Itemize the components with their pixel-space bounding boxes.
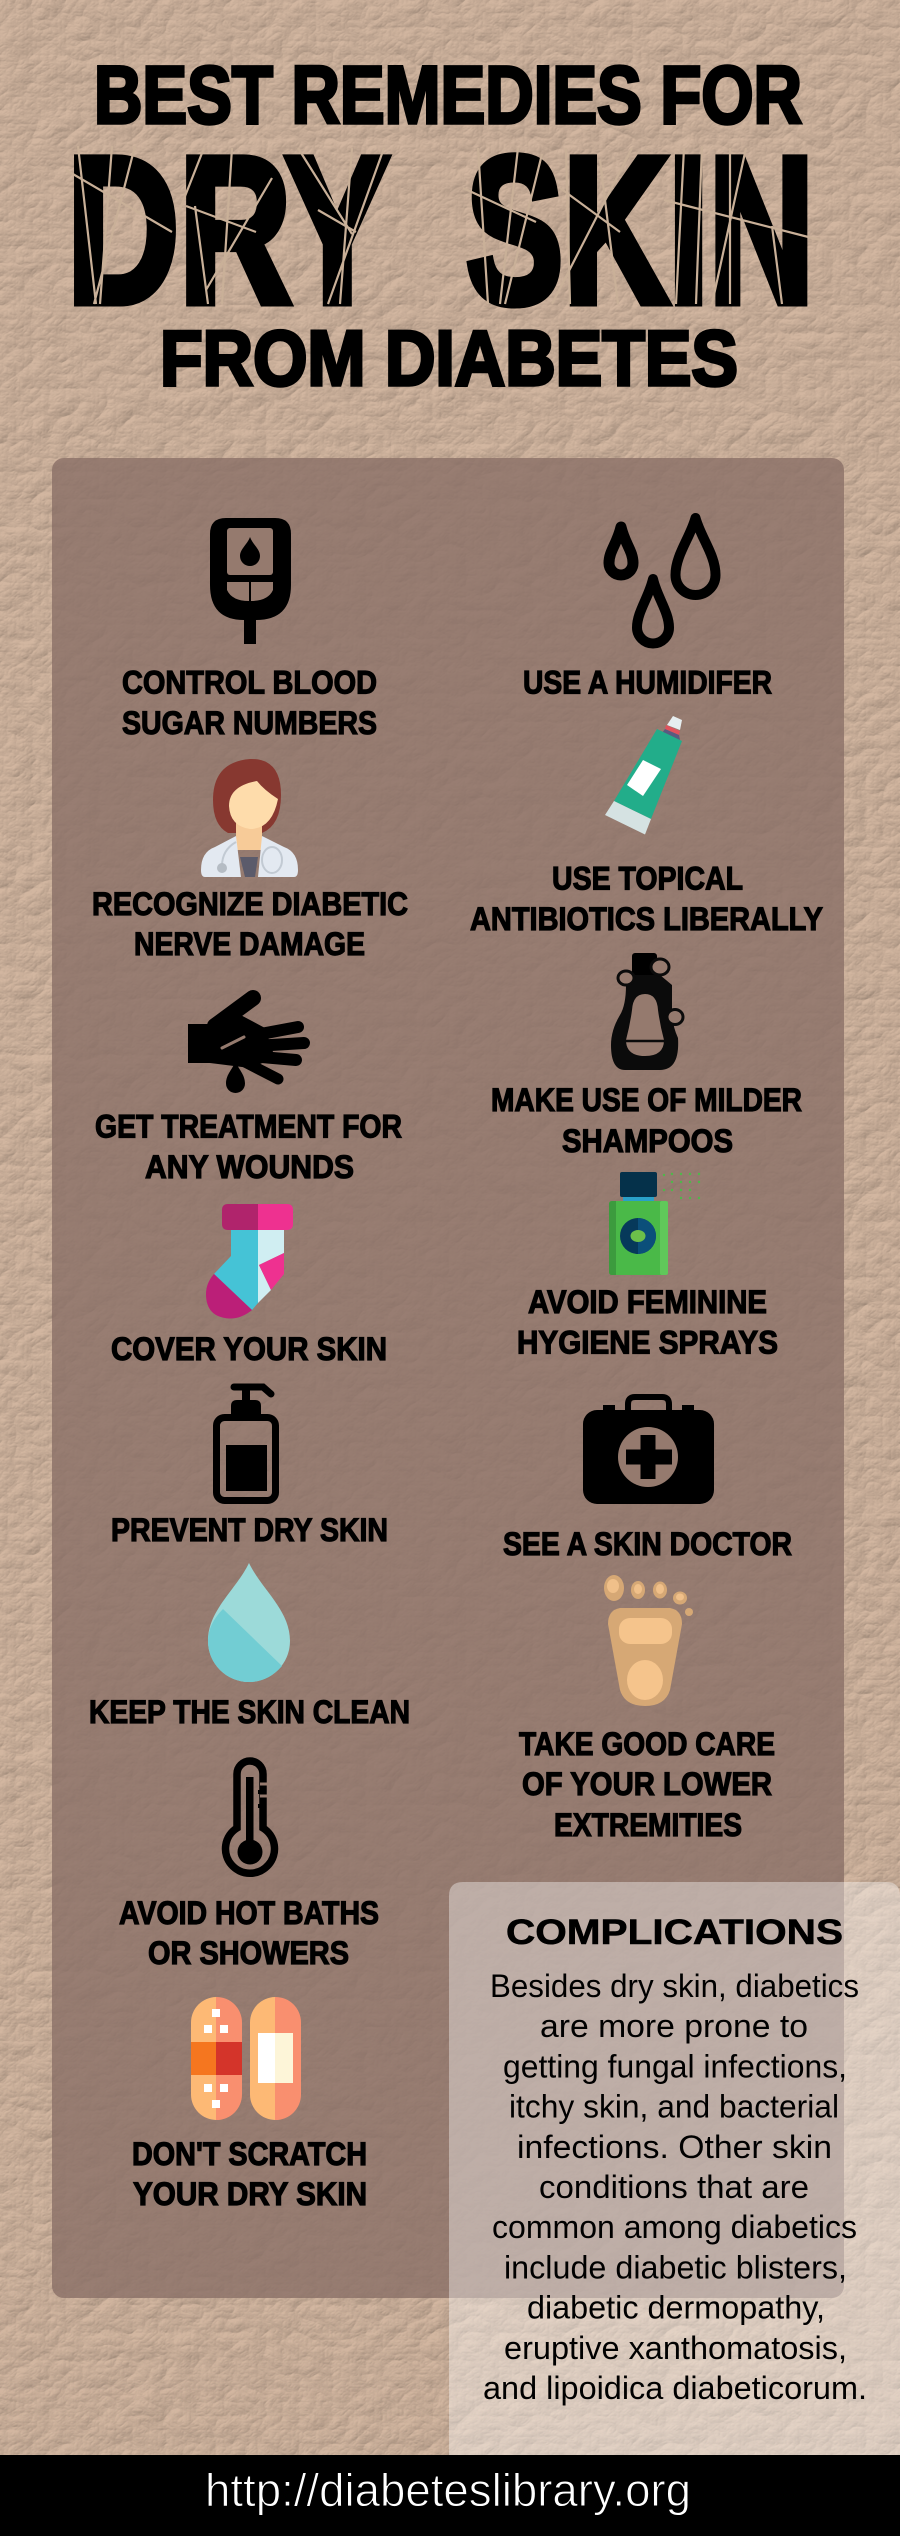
label: RECOGNIZE DIABETIC — [92, 886, 408, 922]
remedy: feminine hygiene sprays — [517, 1172, 778, 1360]
label: SEE A SKIN DOCTOR — [503, 1526, 792, 1562]
label: GET TREATMENT FOR — [95, 1108, 402, 1144]
body text: and lipoidica diabeticorum. — [483, 2370, 867, 2406]
remedy: keep skin clean — [89, 1563, 410, 1730]
label: SHAMPOOS — [562, 1123, 733, 1159]
panel: complications — [449, 1882, 900, 2455]
label — [92, 886, 408, 962]
remedy: topical antibiotics — [470, 716, 823, 937]
label — [132, 2136, 367, 2212]
title — [66, 50, 820, 402]
icon: pump bottle — [216, 1387, 276, 1500]
label: DON'T SCRATCH — [132, 2136, 367, 2172]
body text: conditions that are — [539, 2169, 809, 2205]
body text: getting fungal infections, — [503, 2048, 847, 2084]
label — [519, 1726, 775, 1843]
remedy: cover your skin — [111, 1204, 387, 1367]
icon: foot — [604, 1575, 693, 1706]
icon: three drops — [609, 518, 716, 644]
title line: dry skin: DRY — [67, 115, 389, 347]
remedy: treat wounds — [95, 998, 402, 1185]
body text: eruptive xanthomatosis, — [504, 2330, 847, 2366]
remedy: lower extremities — [519, 1575, 775, 1843]
icon: sock — [206, 1204, 293, 1319]
icon: bandages — [191, 1997, 301, 2120]
label: OR SHOWERS — [148, 1935, 349, 1971]
label: ANTIBIOTICS LIBERALLY — [470, 901, 823, 937]
label: YOUR DRY SKIN — [133, 2176, 367, 2212]
remedy: don't scratch — [132, 1997, 367, 2212]
remedy: prevent dry skin — [111, 1387, 388, 1548]
label — [517, 1284, 778, 1360]
heading: complications: COMPLICATIONS — [506, 1913, 843, 1952]
body text: infections. Other skin — [517, 2129, 832, 2165]
remedy: milder shampoos — [491, 953, 802, 1159]
body text: are more prone to — [540, 2008, 808, 2044]
body text — [483, 1968, 867, 2406]
label: EXTREMITIES — [554, 1807, 742, 1843]
icon: bleeding hand — [188, 998, 304, 1093]
icon: doctor — [201, 759, 298, 877]
body text: Besides dry skin, diabetics — [490, 1968, 859, 2004]
icon: water drop — [208, 1563, 290, 1682]
label: CONTROL BLOOD — [122, 664, 377, 700]
label: ANY WOUNDS — [145, 1149, 354, 1185]
remedy: diabetic nerve damage — [92, 759, 408, 962]
body text: include diabetic blisters, — [504, 2249, 847, 2285]
footer url: http://diabeteslibrary.org — [205, 2464, 691, 2516]
panel: remedies background — [52, 458, 844, 2298]
label: KEEP THE SKIN CLEAN — [89, 1694, 410, 1730]
label: USE TOPICAL — [552, 860, 743, 896]
body text: diabetic dermopathy, — [527, 2290, 825, 2326]
remedy: see a skin doctor — [503, 1397, 792, 1562]
icon: medical kit — [583, 1397, 714, 1504]
label: USE A HUMIDIFER — [523, 664, 772, 700]
label: SUGAR NUMBERS — [122, 705, 377, 741]
label: NERVE DAMAGE — [134, 926, 365, 962]
remedy: control blood sugar — [122, 518, 377, 741]
label: HYGIENE SPRAYS — [517, 1324, 778, 1360]
body text: itchy skin, and bacterial — [509, 2089, 839, 2125]
label — [470, 860, 823, 937]
label: AVOID FEMININE — [528, 1284, 767, 1320]
label — [122, 664, 377, 741]
label: OF YOUR LOWER — [522, 1766, 772, 1802]
icon: thermometer — [226, 1761, 274, 1873]
label: COVER YOUR SKIN — [111, 1331, 387, 1367]
footer bar — [0, 2455, 900, 2536]
icon: spray bottle — [609, 1172, 700, 1275]
icon: shampoo bottle — [611, 953, 683, 1070]
label: AVOID HOT BATHS — [119, 1895, 379, 1931]
label — [119, 1895, 379, 1971]
icon: ointment tube — [605, 716, 682, 834]
title line: dry skin — [66, 115, 820, 347]
label: MAKE USE OF MILDER — [491, 1082, 802, 1118]
body text: common among diabetics — [492, 2209, 857, 2245]
label: PREVENT DRY SKIN — [111, 1512, 388, 1548]
title line: from diabetes: FROM DIABETES — [160, 314, 738, 402]
label — [491, 1082, 802, 1159]
icon: glucose meter — [210, 518, 291, 644]
remedy: use a humidifier — [523, 518, 772, 700]
label — [95, 1108, 402, 1185]
label: TAKE GOOD CARE — [519, 1726, 775, 1762]
remedy: avoid hot baths — [119, 1761, 379, 1971]
